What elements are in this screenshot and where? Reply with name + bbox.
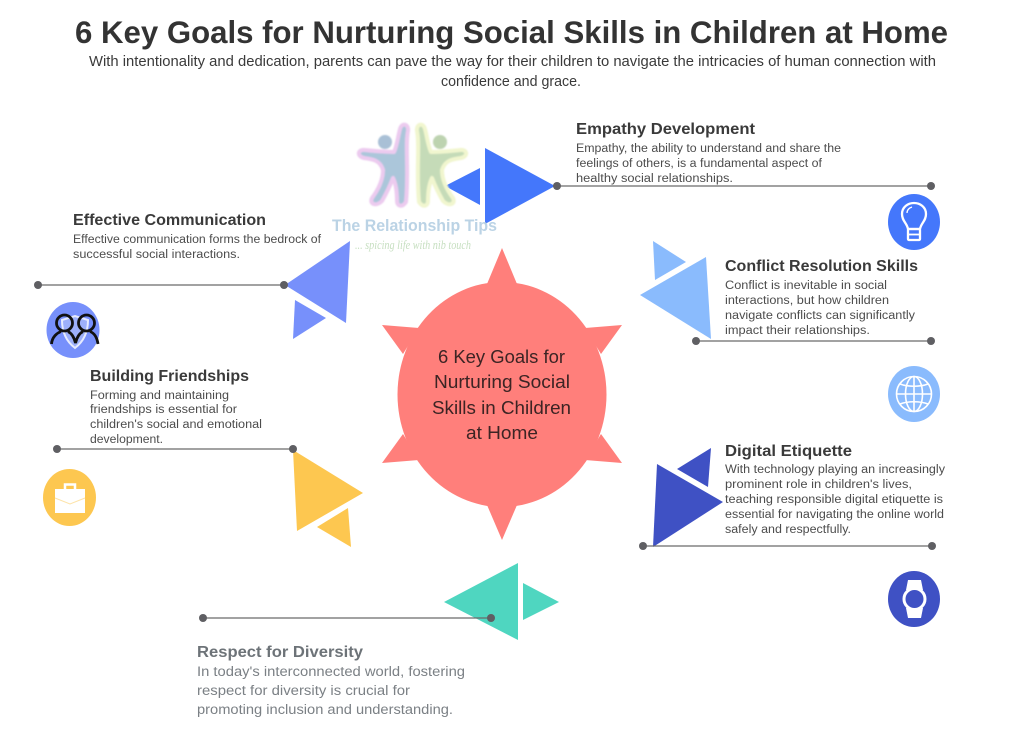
panel: digital etiquette	[639, 443, 945, 627]
subtitle	[89, 54, 936, 90]
central label: at Home	[466, 422, 538, 443]
panel: building friendships	[43, 368, 297, 526]
body text: essential for navigating the online world	[725, 509, 944, 521]
body text	[197, 664, 465, 717]
body text: feelings of others, is a fundamental aspect of	[576, 158, 823, 170]
icon: two people	[46, 302, 100, 358]
leader line	[692, 337, 935, 345]
central label: Skills in Children	[432, 397, 571, 418]
heading: Conflict Resolution Skills	[725, 258, 918, 275]
heading: Effective Communication	[73, 212, 266, 229]
body text: Forming and maintaining	[90, 390, 229, 402]
icon: globe	[888, 366, 940, 422]
panel: effective communication	[34, 212, 322, 358]
body text	[73, 234, 322, 261]
heading: Respect for Diversity	[197, 644, 363, 661]
panel: conflict resolution skills	[692, 258, 940, 422]
body text: respect for diversity is crucial for	[197, 683, 411, 698]
panel: respect for diversity	[197, 614, 495, 717]
central starburst	[382, 248, 622, 540]
body text	[725, 464, 945, 536]
arrow: friendships triangles	[293, 450, 363, 547]
body text: development.	[90, 434, 163, 446]
body text: interactions, but how children	[725, 295, 889, 307]
body text: healthy social relationships.	[576, 173, 733, 185]
subtitle: confidence and grace.	[441, 74, 581, 90]
body text: teaching responsible digital etiquette is	[725, 494, 943, 506]
heading: Empathy Development	[576, 121, 756, 138]
arrow: conflict triangles	[640, 241, 711, 339]
body text	[725, 280, 915, 337]
leader line	[553, 182, 935, 190]
icon: lightbulb	[888, 194, 940, 250]
leader line	[34, 281, 288, 289]
leader line	[199, 614, 495, 622]
arrow: communication triangles	[285, 241, 350, 339]
body text: navigate conflicts can significantly	[725, 310, 915, 322]
central label: Nurturing Social	[434, 371, 570, 392]
body text: successful social interactions.	[73, 249, 240, 261]
body text: safely and respectfully.	[725, 524, 851, 536]
panel: empathy development	[553, 121, 940, 250]
body text: In today's interconnected world, fostering	[197, 664, 465, 679]
logo tagline: ... spicing life with nib touch	[355, 237, 471, 252]
heading: Building Friendships	[90, 368, 249, 385]
heading: Digital Etiquette	[725, 443, 852, 460]
body text: Empathy, the ability to understand and share the	[576, 143, 841, 155]
body text: prominent role in children's lives,	[725, 479, 912, 491]
body text: Conflict is inevitable in social	[725, 280, 887, 292]
logo name: The Relationship Tips	[332, 216, 497, 235]
central label: 6 Key Goals for	[438, 346, 565, 367]
title: 6 Key Goals for Nurturing Social Skills in Children at Home	[75, 14, 948, 50]
body text: promoting inclusion and understanding.	[197, 702, 453, 717]
arrow: diversity triangles	[444, 563, 559, 640]
body text: With technology playing an increasingly	[725, 464, 945, 476]
icon: briefcase	[43, 469, 96, 526]
leader line	[639, 542, 936, 550]
arrow: empathy triangles	[445, 148, 555, 224]
body text: children's social and emotional	[90, 419, 262, 431]
central label	[432, 346, 571, 443]
body text: friendships is essential for	[90, 404, 237, 416]
body text: impact their relationships.	[725, 325, 870, 337]
body text	[576, 143, 841, 185]
logo figures	[359, 125, 466, 206]
body text	[90, 390, 262, 446]
body text: Effective communication forms the bedrock of	[73, 234, 322, 246]
watermark logo	[332, 125, 497, 252]
arrow: digital triangles	[653, 448, 723, 547]
subtitle: With intentionality and dedication, parents can pave the way for their children to navigate the intricacies of human connection with	[89, 54, 936, 70]
icon: watch	[888, 571, 940, 627]
leader line	[53, 445, 297, 453]
